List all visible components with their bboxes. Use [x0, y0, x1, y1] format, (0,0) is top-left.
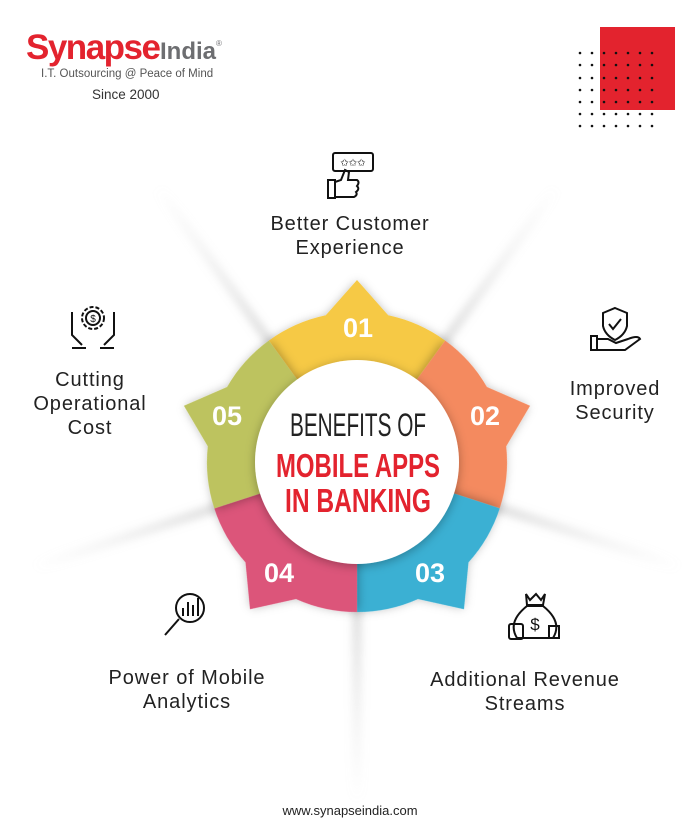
label: Cutting Operational Cost: Cutting	[55, 369, 125, 391]
center title: IN BANKING	[285, 482, 431, 519]
icon: hands with gear and dollar	[72, 307, 114, 348]
numbers: 02	[470, 401, 500, 431]
label: Power of Mobile Analytics: Analytics	[143, 691, 231, 713]
numbers: 01	[343, 313, 373, 343]
numbers: 03	[415, 558, 445, 588]
label: Cutting Operational Cost	[33, 369, 147, 439]
center title: BENEFITS OF	[290, 407, 426, 443]
icon: thumbs up with stars	[328, 153, 373, 198]
logo: India	[160, 38, 217, 65]
segment 05	[157, 322, 384, 546]
center title: MOBILE APPS	[276, 447, 440, 484]
icon: money bag with coins	[509, 594, 559, 639]
logo	[26, 28, 222, 102]
footer url: www.synapseindia.com	[282, 803, 418, 818]
icon: shield in hand	[591, 308, 640, 350]
icon: chart with magnifier	[165, 594, 204, 635]
label: Additional Revenue Streams	[430, 669, 620, 715]
icon: thumbs up with stars: ✩✩✩	[340, 158, 366, 169]
decoration: red square with dots	[579, 27, 675, 127]
label: Additional Revenue Streams: Streams	[485, 693, 565, 715]
label: Power of Mobile Analytics: Power of Mobile	[109, 667, 265, 689]
label: Power of Mobile Analytics	[109, 667, 265, 713]
label: Better Customer Experience: Experience	[295, 237, 405, 259]
label: Improved Security: Security	[575, 402, 655, 424]
segment 02	[330, 322, 557, 546]
label: Better Customer Experience	[270, 213, 430, 259]
numbers	[212, 313, 500, 588]
logo: Since 2000	[92, 87, 160, 102]
segment 04	[179, 410, 428, 661]
center circle	[255, 360, 459, 564]
segment 03	[286, 410, 535, 661]
logo: ®	[216, 39, 222, 48]
label: Improved Security: Improved	[570, 378, 660, 400]
icon: hands with gear and dollar: $	[90, 314, 96, 325]
logo: I.T. Outsourcing @ Peace of Mind	[41, 68, 213, 80]
icon: money bag with coins: $	[530, 615, 540, 634]
numbers: 04	[264, 558, 294, 588]
label: Cutting Operational Cost: Cost	[68, 417, 112, 439]
wheel	[157, 280, 557, 661]
center title	[276, 407, 440, 519]
logo: Synapse	[26, 28, 160, 67]
label: Better Customer Experience: Better Customer	[270, 213, 430, 235]
numbers: 05	[212, 401, 242, 431]
label: Improved Security	[570, 378, 660, 424]
segment 01	[269, 280, 445, 462]
label: Additional Revenue Streams: Additional Revenue	[430, 669, 620, 691]
shadow rays	[32, 184, 682, 802]
label: Cutting Operational Cost: Operational	[33, 393, 147, 415]
